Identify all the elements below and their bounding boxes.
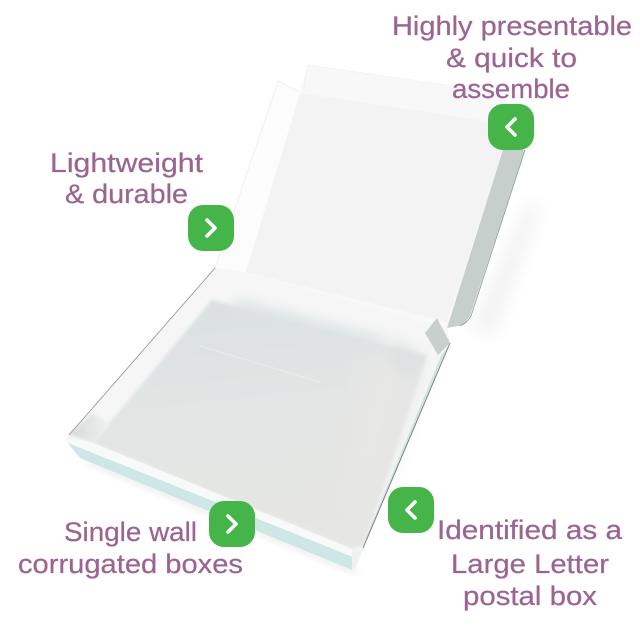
label: single wall [18,517,243,579]
badge: left chevron, top right [488,104,534,150]
label: highly presentable: & quick to [446,43,577,73]
base tray [66,268,450,570]
corner shading [69,413,110,443]
label: lightweight: & durable [65,179,188,209]
tray back wall [212,276,430,356]
label: highly presentable [392,11,632,104]
label: identified: postal box [463,581,598,611]
label: identified: Large Letter [451,549,609,579]
corner tab [425,318,450,355]
label: lightweight [50,148,204,209]
label: lightweight: Lightweight [50,148,204,178]
soft shadow behind box [80,200,540,574]
badge: right chevron, bottom [209,501,255,547]
badge: left chevron, bottom [388,487,434,533]
label: identified: Identified as a [437,515,623,545]
badge: right chevron, left [188,205,234,251]
tray right wall [365,346,448,540]
label: identified [437,515,623,611]
tray front wall [67,442,352,570]
floor crease [200,346,320,382]
tray floor [93,300,427,549]
label: single wall: corrugated boxes [18,549,243,579]
label: highly presentable: Highly presentable [392,11,632,41]
open lid [215,65,525,328]
label: single wall: Single wall [64,517,197,547]
box illustration [66,65,525,570]
label: highly presentable: assemble [452,74,570,104]
